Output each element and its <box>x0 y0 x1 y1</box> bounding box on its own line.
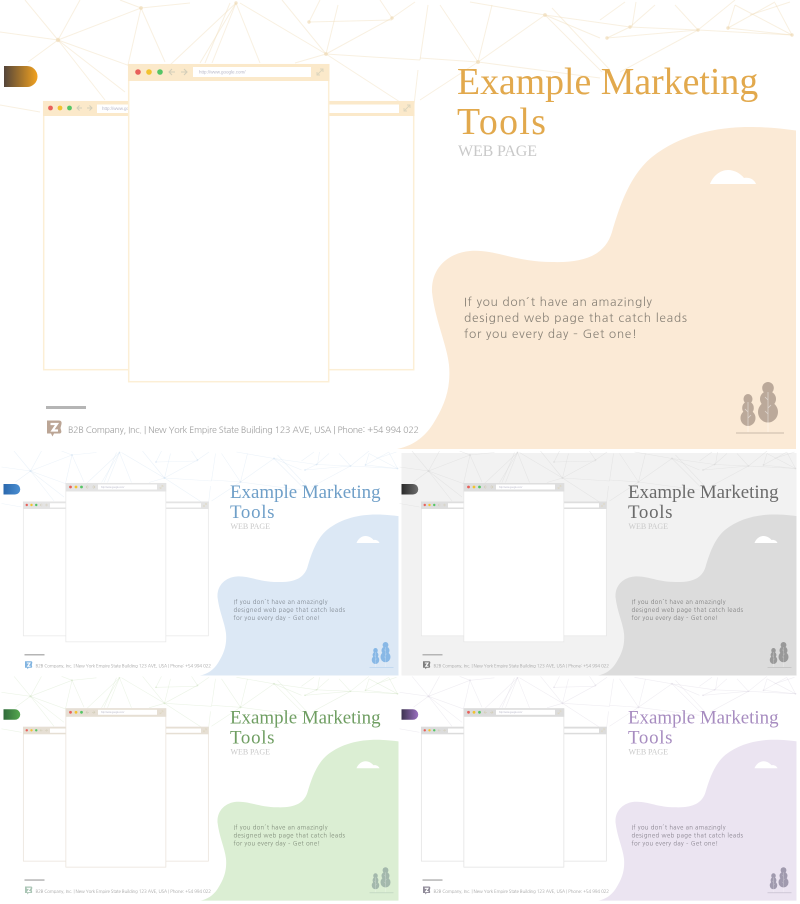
title: Example Marketing <box>628 482 779 503</box>
body text: designed web page that catch leads <box>464 312 687 324</box>
slide: blue variant <box>2 451 402 676</box>
cloud icon <box>356 536 380 543</box>
organic blob <box>598 740 800 901</box>
body text: designed web page that catch leads <box>632 832 743 838</box>
body text: designed web page that catch leads <box>234 607 345 613</box>
slide: purple variant <box>400 676 800 901</box>
title: Example Marketing <box>457 61 758 103</box>
slide: gray variant <box>400 451 800 676</box>
slide background <box>402 453 798 676</box>
icon: gradient tab <box>402 484 418 494</box>
network background <box>2 451 398 507</box>
body text: If you don´t have an amazingly <box>234 824 328 830</box>
icon: company logo <box>423 887 430 895</box>
subtitle: WEB PAGE <box>230 747 270 756</box>
title: Tools <box>628 502 672 523</box>
network background <box>2 676 398 732</box>
footer rule <box>24 879 44 881</box>
address text back left: http://www.google.com/ <box>102 106 149 111</box>
address text front: http://www.google.com/ <box>199 70 246 74</box>
front browser window <box>128 64 330 382</box>
footer rule <box>422 879 442 881</box>
cloud icon <box>710 170 756 184</box>
title: Tools <box>457 101 546 143</box>
network background <box>400 676 796 732</box>
icon: trees <box>768 867 792 893</box>
icon: gradient tab <box>4 709 20 720</box>
icon: company logo <box>47 420 62 436</box>
address text front: http://www.google.com/ <box>499 486 523 489</box>
footer text: B2B Company, Inc. | New York Empire State Building 123 AVE, USA | Phone: +54 994 022 <box>434 889 609 894</box>
icon: gradient tab <box>4 484 20 494</box>
front browser window <box>464 483 564 642</box>
body text: If you don´t have an amazingly <box>632 824 726 830</box>
title: Example Marketing <box>628 707 779 728</box>
footer text: B2B Company, Inc. | New York Empire State Building 123 AVE, USA | Phone: +54 994 022 <box>36 664 211 668</box>
icon: company logo <box>423 661 430 669</box>
back browser windows <box>421 502 607 636</box>
slide: orange main <box>0 0 800 449</box>
footer text: B2B Company, Inc. | New York Empire State Building 123 AVE, USA | Phone: +54 994 022 <box>36 889 211 894</box>
front browser window <box>464 708 564 867</box>
back browser windows <box>23 727 209 861</box>
address text front: http://www.google.com/ <box>101 486 125 489</box>
title: Example Marketing <box>230 707 381 728</box>
address text front: http://www.google.com/ <box>101 711 125 714</box>
back browser window left and right <box>43 101 414 370</box>
title: Tools <box>628 727 672 748</box>
footer rule <box>46 406 86 409</box>
icon: gradient tab <box>4 66 37 87</box>
organic blob <box>200 740 402 901</box>
front browser window <box>66 483 166 642</box>
back browser windows <box>421 727 607 861</box>
front browser window <box>66 708 166 867</box>
icon: company logo <box>25 661 32 669</box>
organic blob <box>397 127 800 449</box>
subtitle: WEB PAGE <box>458 143 537 160</box>
icon: trees <box>370 867 394 893</box>
footer text: B2B Company, Inc. | New York Empire State Building 123 AVE, USA | Phone: +54 994 022 <box>434 664 609 668</box>
subtitle: WEB PAGE <box>230 522 270 531</box>
network background <box>0 0 794 112</box>
icon: trees <box>768 642 792 668</box>
icon: trees <box>370 642 394 668</box>
organic blob <box>200 514 402 676</box>
network background <box>400 451 796 507</box>
body text: for you every day – Get one! <box>234 615 320 621</box>
title: Example Marketing <box>230 482 381 503</box>
body text: If you don´t have an amazingly <box>632 599 726 605</box>
body text: for you every day – Get one! <box>632 840 718 846</box>
cloud icon <box>754 536 778 543</box>
title: Tools <box>230 727 274 748</box>
address text front: http://www.google.com/ <box>499 711 523 714</box>
icon: company logo <box>25 887 32 895</box>
title: Tools <box>230 502 274 523</box>
icon: trees <box>736 382 784 433</box>
organic blob <box>598 514 800 676</box>
icon: gradient tab <box>402 709 418 720</box>
body text: for you every day – Get one! <box>464 328 637 340</box>
cloud icon <box>754 761 778 768</box>
body text: If you don´t have an amazingly <box>464 296 652 308</box>
footer rule <box>422 654 442 656</box>
footer text: B2B Company, Inc. | New York Empire State Building 123 AVE, USA | Phone: +54 994 022 <box>68 426 419 435</box>
body text: for you every day – Get one! <box>632 615 718 621</box>
slide: green variant <box>2 676 402 901</box>
subtitle: WEB PAGE <box>628 747 668 756</box>
body text: If you don´t have an amazingly <box>234 599 328 605</box>
body text: designed web page that catch leads <box>234 832 345 838</box>
cloud icon <box>356 761 380 768</box>
subtitle: WEB PAGE <box>628 522 668 531</box>
body text: for you every day – Get one! <box>234 840 320 846</box>
body text: designed web page that catch leads <box>632 607 743 613</box>
back browser windows <box>23 502 209 636</box>
footer rule <box>24 654 44 656</box>
